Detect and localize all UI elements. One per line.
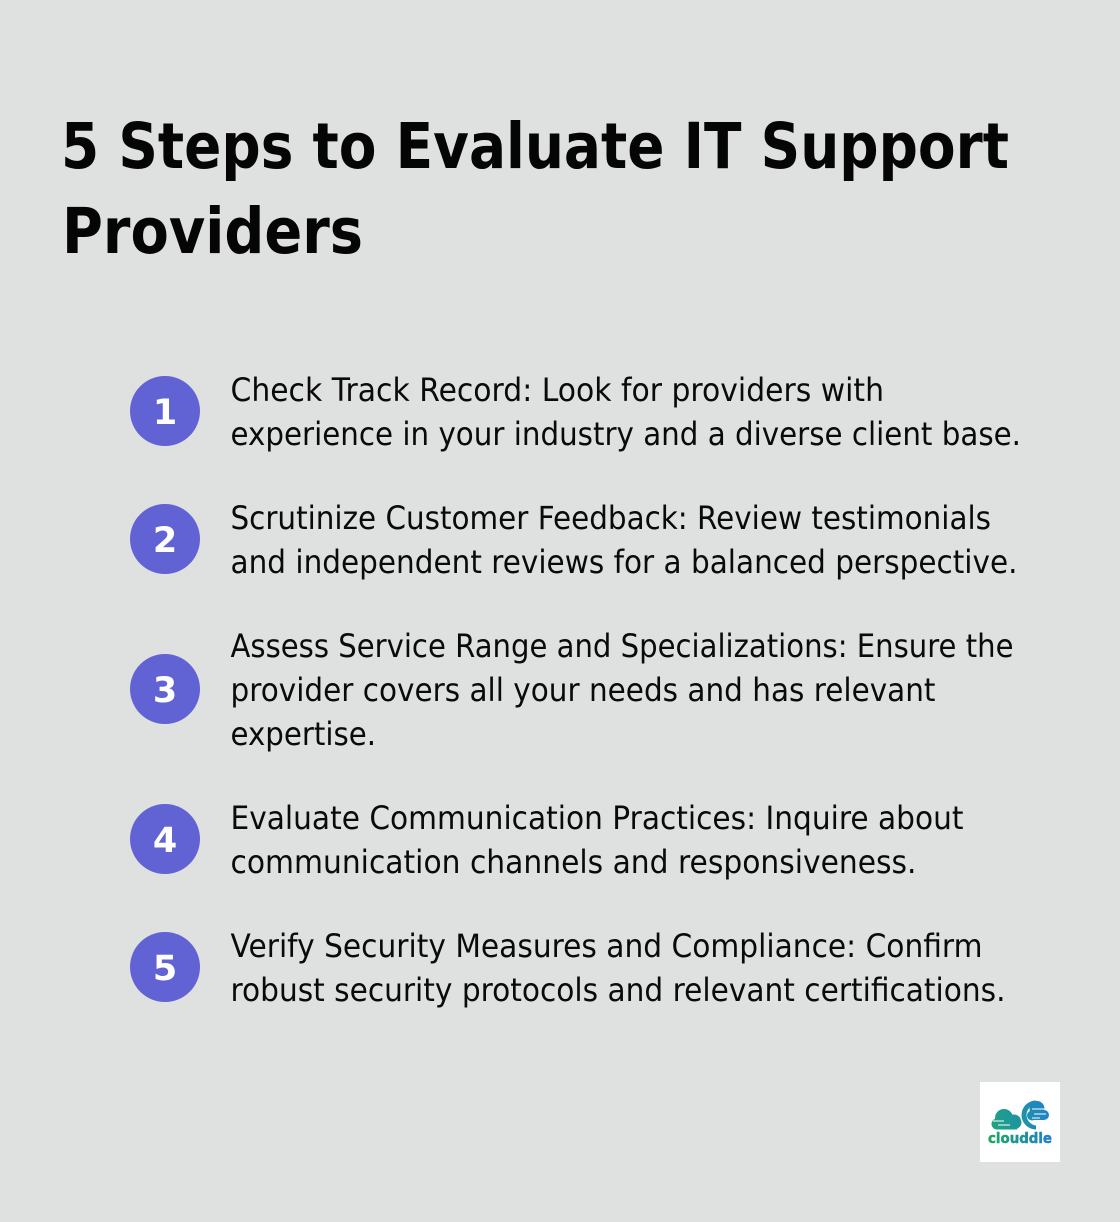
step 4 text: communication channels and responsiveness. (230, 843, 916, 881)
step 2 text (230, 499, 1018, 581)
step 5 text (230, 927, 1006, 1009)
step 4 text (230, 799, 964, 881)
step 1 number badge (130, 376, 200, 446)
step 3 number badge: 3 (153, 671, 177, 711)
step 5 (130, 927, 1006, 1009)
logo wordmark: clouddle (988, 1131, 1052, 1147)
step 5 number badge (130, 932, 200, 1002)
logo: clouddle (980, 1082, 1060, 1162)
step 5 text: Verify Security Measures and Compliance: Confirm (230, 927, 982, 965)
step 4 number badge (130, 804, 200, 874)
step 1 text: Check Track Record: Look for providers with (230, 371, 884, 409)
step 2 text: and independent reviews for a balanced perspective. (230, 543, 1018, 581)
step 3 text: expertise. (230, 715, 376, 753)
step 1 (130, 371, 1021, 453)
step 4 text: Evaluate Communication Practices: Inquire about (230, 799, 964, 837)
step 4 (130, 799, 964, 881)
title (61, 110, 1009, 268)
icon: clouds (992, 1099, 1052, 1131)
step 3 number badge (130, 654, 200, 724)
step 3 text (230, 627, 1014, 753)
title: 5 Steps to Evaluate IT Support (61, 110, 1009, 183)
step 3 (130, 627, 1014, 753)
title: Providers (62, 195, 363, 268)
step 4 number badge: 4 (153, 821, 177, 861)
step 5 number badge: 5 (153, 949, 177, 989)
step 5 text: robust security protocols and relevant certifications. (230, 971, 1006, 1009)
step 1 text (230, 371, 1021, 453)
step 1 text: experience in your industry and a diverse client base. (230, 415, 1021, 453)
step 2 (130, 499, 1018, 581)
step 2 number badge (130, 504, 200, 574)
step 1 number badge: 1 (153, 393, 177, 433)
step 2 text: Scrutinize Customer Feedback: Review testimonials (230, 499, 991, 537)
step 3 text: provider covers all your needs and has relevant (230, 671, 936, 709)
step 3 text: Assess Service Range and Specializations: Ensure the (230, 627, 1014, 665)
step 2 number badge: 2 (153, 521, 177, 561)
